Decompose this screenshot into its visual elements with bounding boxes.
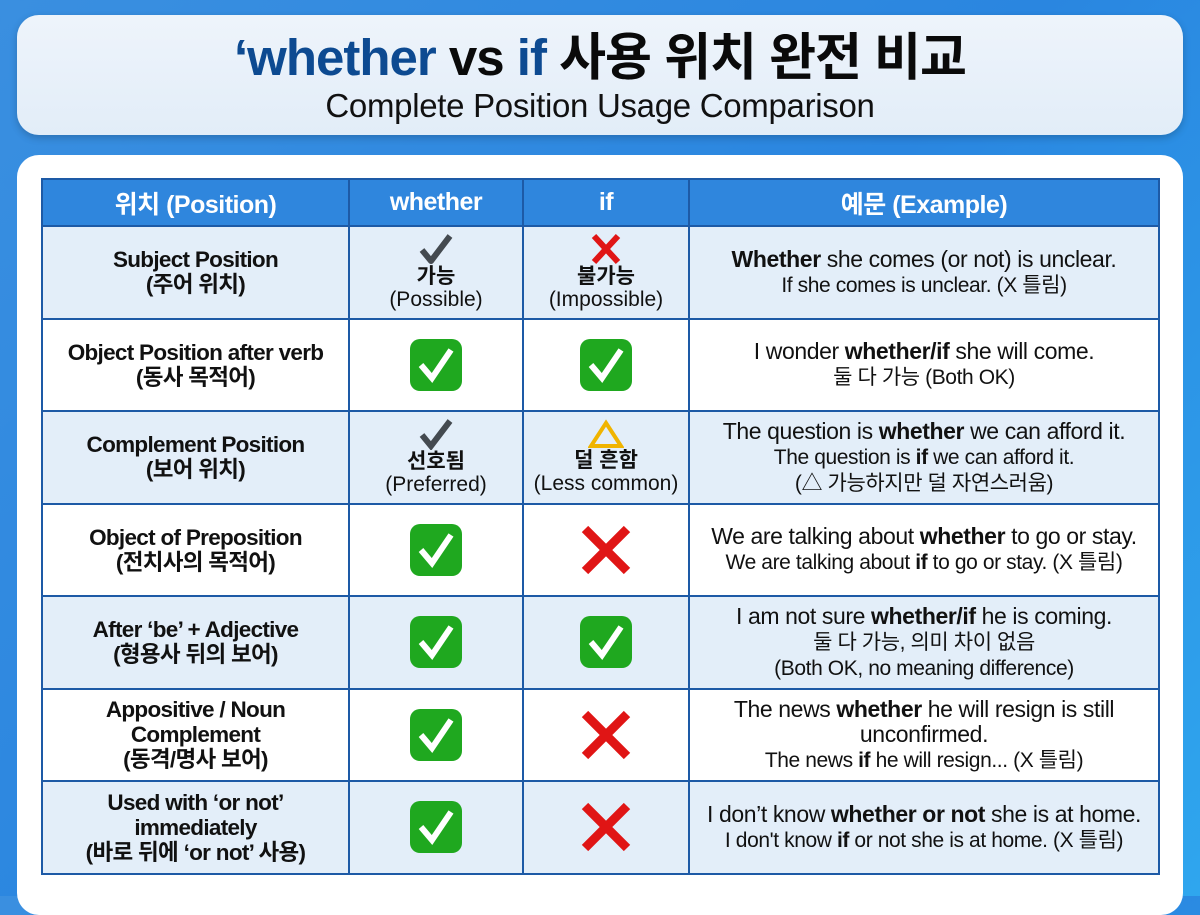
- comparison table: 불가능: [577, 265, 635, 288]
- comparison table: (동격/명사 보어): [123, 747, 268, 772]
- comparison table: (Preferred): [385, 473, 487, 496]
- comparison table: immediately: [134, 815, 257, 840]
- comparison table: Object of Preposition: [89, 525, 302, 550]
- comparison table: I am not sure whether/if he is coming.: [736, 603, 1112, 629]
- comparison table: (△ 가능하지만 덜 자연스러움): [795, 472, 1053, 495]
- comparison table: if: [599, 188, 613, 216]
- comparison table: I don’t know whether or not she is at home.: [707, 801, 1141, 827]
- comparison table: Complement Position: [87, 432, 304, 457]
- comparison table: (바로 뒤에 ‘or not’ 사용): [86, 840, 305, 865]
- comparison table: If she comes is unclear. (X 틀림): [781, 274, 1067, 297]
- comparison table: We are talking about if to go or stay. (X 틀림): [726, 551, 1122, 574]
- comparison table: I don't know if or not she is at home. (X 틀림): [725, 829, 1123, 852]
- comparison table: [41, 178, 1160, 875]
- comparison table: whether: [390, 188, 482, 216]
- comparison table: 둘 다 가능 (Both OK): [833, 366, 1015, 389]
- comparison table: Used with ‘or not’: [107, 790, 284, 815]
- comparison table: The question is whether we can afford it.: [723, 418, 1125, 444]
- comparison table: (Both OK, no meaning difference): [774, 657, 1074, 680]
- comparison table: 가능: [417, 265, 455, 288]
- comparison table: I wonder whether/if she will come.: [754, 338, 1094, 364]
- comparison table: Whether she comes (or not) is unclear.: [732, 246, 1116, 272]
- comparison table: The news whether he will resign is still: [734, 696, 1114, 722]
- comparison table: (Impossible): [549, 288, 663, 311]
- comparison table: Appositive / Noun: [106, 697, 285, 722]
- comparison table: We are talking about whether to go or stay.: [711, 523, 1137, 549]
- comparison table: (형용사 뒤의 보어): [113, 642, 278, 667]
- comparison table: 예문 (Example): [841, 190, 1007, 218]
- comparison table: After ‘be’ + Adjective: [93, 617, 298, 642]
- comparison table: (전치사의 목적어): [116, 550, 275, 575]
- comparison table: 덜 흔함: [574, 449, 638, 472]
- subtitle: Complete Position Usage Comparison: [325, 87, 875, 124]
- comparison table: (동사 목적어): [136, 365, 255, 390]
- comparison table: The news if he will resign... (X 틀림): [765, 749, 1083, 772]
- comparison table: Complement: [131, 722, 260, 747]
- main title: ‘whether vs if 사용 위치 완전 비교: [234, 29, 966, 86]
- comparison table: (보어 위치): [146, 457, 245, 482]
- comparison table: 위치 (Position): [115, 190, 276, 218]
- comparison table: 선호됨: [407, 450, 465, 473]
- comparison table: (Less common): [534, 472, 678, 495]
- comparison table: 둘 다 가능, 의미 차이 없음: [813, 631, 1035, 654]
- title panel: [17, 15, 1183, 135]
- comparison table: unconfirmed.: [860, 721, 988, 747]
- comparison table: Object Position after verb: [68, 340, 323, 365]
- comparison table: (Possible): [389, 288, 483, 311]
- comparison table: (주어 위치): [146, 272, 245, 297]
- comparison table: Subject Position: [113, 247, 278, 272]
- comparison table: The question is if we can afford it.: [774, 446, 1074, 469]
